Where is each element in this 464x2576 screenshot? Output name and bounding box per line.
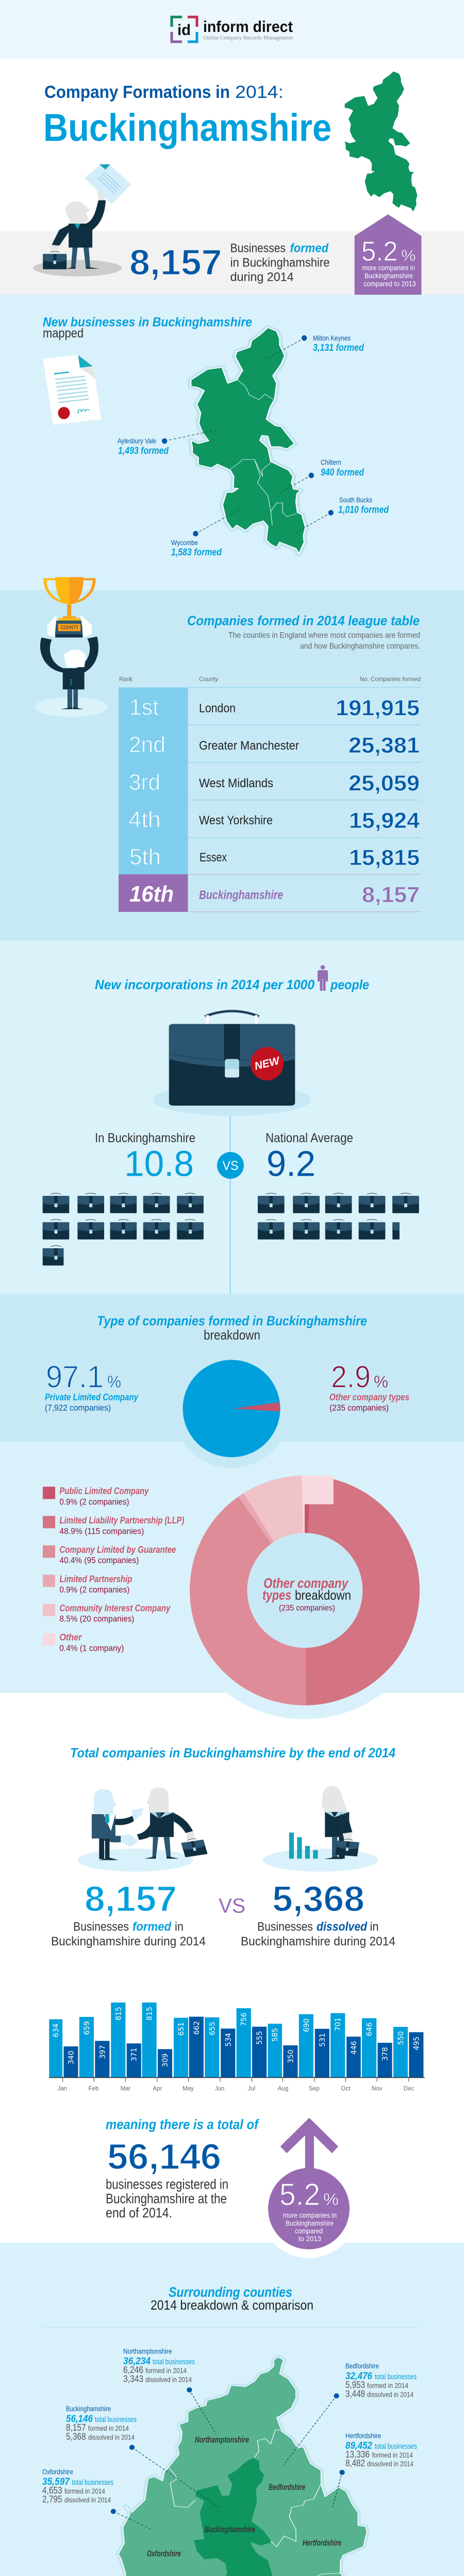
legend: other company types: 40.4% (95 companies) [59,1555,139,1565]
title: Buckinghamshire [43,106,332,149]
callout: 5.2% more companies: Buckinghamshire [364,272,413,280]
comparison: formed vs dissolved: formed [132,1920,172,1934]
comparison: formed vs dissolved: in [370,1920,378,1934]
stat: 97.1% private limited: Private Limited Company [45,1392,139,1402]
callout: Oxfordshire: dissolved in 2014 [64,2496,111,2504]
bar chart: monthly formed and dissolved: 534 [224,2033,233,2046]
bar chart: monthly formed and dissolved: 655 [208,2022,217,2036]
label: Milton Keynes [313,334,364,353]
map: surrounding counties [111,2357,385,2576]
callout: Hertfordshire: formed in 2014 [372,2451,413,2459]
comparison: formed vs dissolved: in [175,1920,184,1934]
stat: 8,157 businesses formed: formed [290,242,329,256]
map: surrounding counties: Oxfordshire [147,2549,181,2558]
callout: Northamptonshire [123,2347,195,2384]
legend: other company types: Limited Partnership [59,1574,132,1584]
table: companies formed league table: Buckinghamshire [199,888,283,902]
table: companies formed league table: County [199,675,218,683]
bar chart: monthly formed and dissolved: Dec [404,2086,414,2092]
bar chart: monthly formed and dissolved: 397 [98,2045,107,2059]
stat: 2.9% other types [329,1360,409,1413]
illustration: businessman with falling chart [263,1786,378,1872]
bar chart: monthly formed and dissolved: 662 [193,2021,201,2035]
callout: Northamptonshire: formed in 2014 [145,2366,187,2375]
logo: inform direct: Online Company Records Management [203,35,293,41]
bar chart: monthly formed and dissolved [49,2003,425,2092]
bar chart: monthly formed and dissolved: 646 [366,2022,374,2036]
callout: arrow 5.2% growth: % [323,2190,339,2209]
chart: donut other company types: (235 companies) [279,1604,335,1613]
callout: Oxfordshire: 2,795 [42,2494,62,2504]
callout: Oxfordshire: 35,597 [42,2477,70,2487]
bar chart: monthly formed and dissolved: 659 [83,2021,91,2035]
callout: Bedfordshire [345,2362,417,2399]
callout: Bedfordshire: 3,448 [345,2388,365,2399]
callout: Buckinghamshire: formed in 2014 [88,2424,129,2432]
callout: 5.2% more companies: compared to 2013 [363,279,416,287]
legend: other company types [43,1486,184,1653]
chart: donut other company types: breakdown [295,1587,351,1603]
bar chart: monthly formed and dissolved: 585 [271,2028,279,2042]
stat: 2.9% other types: % [374,1372,388,1391]
heading: new businesses mapped [43,315,252,341]
callout: Oxfordshire [42,2468,113,2504]
bar chart: monthly formed and dissolved: Oct [341,2086,351,2092]
comparison: formed vs dissolved: Buckinghamshire during 2014 [241,1935,395,1948]
callout: 5.2% more companies: 5.2 [361,236,398,267]
comparison: formed vs dissolved: Businesses [73,1920,129,1934]
comparison: 10.8 vs 9.2: VS [223,1159,238,1173]
callout: Hertfordshire: 89,452 [345,2441,372,2451]
callout: Oxfordshire: formed in 2014 [64,2487,105,2495]
callout: arrow 5.2% growth: Buckinghamshire [286,2219,334,2227]
title: 2014: [235,82,284,102]
table: companies formed league table: 1st [129,694,159,720]
bar chart: monthly formed and dissolved: Jun [215,2086,224,2092]
label: Chiltern [321,458,364,478]
bar chart: monthly formed and dissolved: Sep [309,2086,320,2092]
callout: Northamptonshire: dissolved in 2014 [145,2376,192,2384]
comparison: formed vs dissolved: Buckinghamshire during 2014 [51,1935,206,1948]
bar chart: monthly formed and dissolved: 690 [303,2019,311,2032]
map: Buckinghamshire header [345,72,417,212]
logo: inform direct: inform direct [203,18,293,36]
bar chart: monthly formed and dissolved: 495 [412,2037,421,2050]
callout: Hertfordshire: 8,482 [345,2458,365,2468]
bar chart: monthly formed and dissolved: 550 [397,2031,405,2045]
chart: pie private vs other [172,1349,291,1468]
comparison: 10.8 vs 9.2: National Average [266,1131,353,1145]
title [43,82,332,149]
comparison: formed vs dissolved: VS [219,1895,245,1918]
legend: other company types: 48.9% (115 companies) [59,1526,144,1536]
table: companies formed league table: 191,915 [336,696,420,721]
label: South Bucks: 1,010 formed [338,505,389,515]
table: companies formed league table: Greater Manchester [199,739,299,753]
label: South Bucks [338,496,389,515]
callout: arrow 5.2% growth: to 2013 [299,2234,321,2243]
label: Aylesbury Vale: 1,493 formed [118,446,169,456]
heading: new incorporations per 1000 people [95,965,369,992]
title: Company Formations in [44,82,230,102]
table: companies formed league table: 25,381 [349,733,420,758]
bar chart: monthly formed and dissolved: 815 [146,2007,154,2021]
callout: Buckinghamshire [66,2404,137,2442]
bar chart: monthly formed and dissolved: Mar [121,2086,131,2092]
table: companies formed league table: West Midlands [199,776,273,790]
chart: donut other company types: Other company [263,1575,349,1591]
logo: inform direct [172,17,293,42]
table: companies formed league table: 5th [129,844,161,870]
legend: other company types: 0.9% (2 companies) [59,1585,129,1595]
stat: 2.9% other types: (235 companies) [329,1403,389,1413]
heading: league table: and how Buckinghamshire compares. [300,642,420,651]
table: companies formed league table: West Yorkshire [199,814,273,827]
callout: Bedfordshire: total businesses [375,2372,417,2381]
bar chart: monthly formed and dissolved: Jan [58,2086,67,2092]
stat: total of 56,146 businesses: businesses registered in [106,2176,228,2192]
table: companies formed league table: No. Companies formed [360,675,421,683]
callout: Buckinghamshire: 8,157 [66,2422,86,2433]
icon: large briefcase with NEW badge: NEW [253,1055,282,1073]
heading: type of companies: Type of companies formed in Buckinghamshire [97,1313,367,1329]
comparison: formed vs dissolved: Businesses [257,1920,313,1934]
callout: Oxfordshire: total businesses [72,2478,113,2487]
bar chart: monthly formed and dissolved: 701 [334,2018,342,2031]
bar chart: monthly formed and dissolved: Nov [372,2086,382,2092]
callout: Bedfordshire: formed in 2014 [367,2381,408,2389]
callout: Hertfordshire: dissolved in 2014 [367,2460,413,2468]
legend: other company types: Company Limited by Guarantee [59,1545,176,1555]
illustration: businessman holding document [33,164,131,276]
table: companies formed league table: 4th [128,807,161,833]
heading: surrounding counties: 2014 breakdown & comparison [151,2297,313,2313]
callout: arrow 5.2% growth [259,2118,358,2258]
legend: other company types: Other [59,1632,82,1642]
label: Wycombe: 1,583 formed [171,547,222,558]
table: companies formed league table: London [199,702,236,716]
bar chart: monthly formed and dissolved: 371 [130,2047,139,2061]
table: companies formed league table: 3rd [129,770,160,795]
heading: surrounding counties: Surrounding counties [169,2284,292,2300]
table: companies formed league table: Essex [200,851,227,865]
bar chart: monthly formed and dissolved: 555 [256,2031,264,2045]
label: Milton Keynes: 3,131 formed [313,343,364,353]
label: Aylesbury Vale [118,437,169,456]
legend: other company types: 8.5% (20 companies) [59,1614,134,1624]
stat: 97.1% private limited: 97.1 [46,1360,104,1394]
legend: other company types: 0.4% (1 company) [59,1643,124,1653]
callout: Hertfordshire [345,2432,417,2468]
callout: 5.2% more companies: % [401,247,416,264]
icon: new company document [43,355,101,425]
chart: donut other company types: types [262,1587,291,1603]
callout: Northamptonshire: 36,234 [123,2356,151,2367]
callout: Hertfordshire: total businesses [375,2442,417,2451]
legend: other company types: Community Interest Company [59,1603,171,1614]
legend: other company types: 0.9% (2 companies) [59,1497,129,1507]
label: Wycombe: Wycombe [171,538,198,547]
stat: total of 56,146 businesses [106,2116,260,2221]
map: surrounding counties: Bedfordshire [269,2482,305,2492]
callout: arrow 5.2% growth: 5.2 [279,2177,320,2212]
heading: surrounding counties [41,2284,422,2328]
heading: type of companies [97,1313,367,1343]
callout: Buckinghamshire: 56,146 [66,2414,93,2425]
callout: Buckinghamshire: Buckinghamshire [66,2404,111,2413]
heading: new businesses mapped: mapped [43,326,84,341]
callout: Bedfordshire: 5,953 [345,2380,365,2390]
callout: Oxfordshire: 4,653 [42,2485,62,2496]
comparison: formed vs dissolved: 5,368 [272,1879,364,1919]
callout: Buckinghamshire: total businesses [95,2415,137,2424]
stat: total of 56,146 businesses: meaning there is a total of [106,2116,260,2132]
comparison: 10.8 vs 9.2: In Buckinghamshire [95,1131,195,1145]
callout: Buckinghamshire: 5,368 [66,2432,86,2442]
logo: inform direct: id [177,22,191,39]
comparison: formed vs dissolved: dissolved [317,1920,368,1934]
callout: Northamptonshire: 3,343 [123,2374,143,2384]
stat: 8,157 businesses formed: during 2014 [230,270,294,284]
callout: Oxfordshire: Oxfordshire [42,2468,73,2476]
stat: total of 56,146 businesses: end of 2014. [106,2205,172,2221]
bar chart: monthly formed and dissolved: 350 [287,2049,295,2063]
label: Chiltern: 940 formed [321,467,364,478]
illustration: man holding county trophy: COUNTY [61,625,78,631]
bar chart: monthly formed and dissolved: Feb [89,2086,98,2092]
callout: Bedfordshire: 32,476 [345,2371,372,2382]
heading: league table [187,613,420,651]
callout: Bedfordshire: Bedfordshire [345,2362,379,2370]
stat: 2.9% other types: 2.9 [331,1360,371,1394]
bar chart: monthly formed and dissolved: 756 [240,2012,248,2026]
callout: Northamptonshire: Northamptonshire [123,2347,172,2355]
heading: new incorporations per 1000 people: people [330,977,369,992]
map: surrounding counties: Northamptonshire [195,2435,249,2445]
label: Wycombe [171,538,222,558]
bar chart: monthly formed and dissolved: 340 [67,2050,75,2064]
bar chart: monthly formed and dissolved: 651 [177,2022,186,2036]
heading: new incorporations per 1000 people: New incorporations in 2014 per 1000 [95,977,315,992]
stat: 8,157 businesses formed: Businesses [230,242,286,256]
stat: 97.1% private limited: (7,922 companies) [45,1403,111,1413]
illustration: businessmen shaking hands [77,1788,208,1872]
callout: Buckinghamshire: dissolved in 2014 [88,2433,135,2441]
bar chart: monthly formed and dissolved: 531 [319,2033,327,2047]
heading: league table: Companies formed in 2014 league table [187,613,420,629]
bar chart: monthly formed and dissolved: 815 [114,2007,123,2021]
bar chart: monthly formed and dissolved: 446 [350,2041,358,2055]
comparison: formed vs dissolved [51,1879,395,1948]
callout: Hertfordshire: Hertfordshire [345,2432,381,2440]
heading: league table: The counties in England where most companies are formed [228,631,420,640]
chart: donut other company types [176,1462,434,1719]
comparison: 10.8 vs 9.2: 9.2 [267,1144,316,1184]
label: Milton Keynes: Milton Keynes [313,334,351,342]
stat: 8,157 businesses formed: in Buckinghamshire [230,256,330,270]
map: surrounding counties: Buckinghamshire [205,2524,255,2534]
stat: 97.1% private limited: % [107,1372,121,1391]
icon: large briefcase with NEW badge [153,1011,311,1294]
table: companies formed league table [119,675,421,912]
callout: 5.2% more companies [355,214,421,295]
stat: 97.1% private limited [45,1360,139,1413]
callout: arrow 5.2% growth: more companies in [283,2211,337,2219]
table: companies formed league table: Rank [119,675,133,683]
callout: Hertfordshire: 13,336 [345,2449,370,2460]
bar chart: monthly formed and dissolved: 309 [161,2054,170,2067]
stat: total of 56,146 businesses: 56,146 [107,2137,221,2177]
table: companies formed league table: 16th [129,882,174,907]
bar chart: monthly formed and dissolved: 634 [52,2024,60,2037]
heading: total companies: Total companies in Buckinghamshire by the end of 2014 [70,1745,395,1760]
bar chart: monthly formed and dissolved: Apr [153,2086,162,2092]
bar chart: monthly formed and dissolved: 378 [382,2047,390,2061]
legend: other company types: Public Limited Company [59,1486,149,1496]
table: companies formed league table: 2nd [129,732,165,757]
table: companies formed league table: 15,924 [349,808,420,833]
label: Aylesbury Vale: Aylesbury Vale [118,437,156,445]
bar chart: monthly formed and dissolved: May [183,2086,194,2092]
comparison: formed vs dissolved: 8,157 [85,1879,177,1919]
table: companies formed league table: 8,157 [362,883,420,907]
callout: 5.2% more companies: more companies in [362,264,415,272]
comparison: 10.8 vs 9.2: 10.8 [124,1144,194,1184]
table: companies formed league table: 25,059 [349,771,420,795]
stat: 8,157 businesses formed: 8,157 [129,242,222,282]
callout: Bedfordshire: dissolved in 2014 [367,2390,413,2398]
callout: Northamptonshire: 6,246 [123,2365,143,2375]
label: Chiltern: Chiltern [321,458,341,466]
label: South Bucks: South Bucks [339,496,372,504]
heading: type of companies: breakdown [204,1327,260,1343]
stat: 8,157 businesses formed [129,242,330,284]
stat: 2.9% other types: Other company types [329,1392,409,1402]
callout: Northamptonshire: total businesses [153,2358,195,2366]
map: Buckinghamshire districts [162,328,334,554]
comparison: 10.8 vs 9.2 [95,1131,353,1184]
bar chart: monthly formed and dissolved: Aug [278,2086,288,2092]
bar chart: monthly formed and dissolved: Jul [248,2086,255,2092]
stat: total of 56,146 businesses: Buckinghamshire at the [106,2191,227,2206]
table: companies formed league table: 15,815 [349,845,420,870]
pictogram: briefcases 10.8 and 9.2 [43,1193,419,1265]
legend: other company types: Limited Liability Partnership (LLP) [59,1515,184,1526]
illustration: man holding county trophy [35,577,108,717]
heading: new businesses mapped: New businesses in Buckinghamshire [43,315,252,330]
callout: arrow 5.2% growth: compared [295,2227,323,2235]
map: surrounding counties: Hertfordshire [303,2538,341,2548]
